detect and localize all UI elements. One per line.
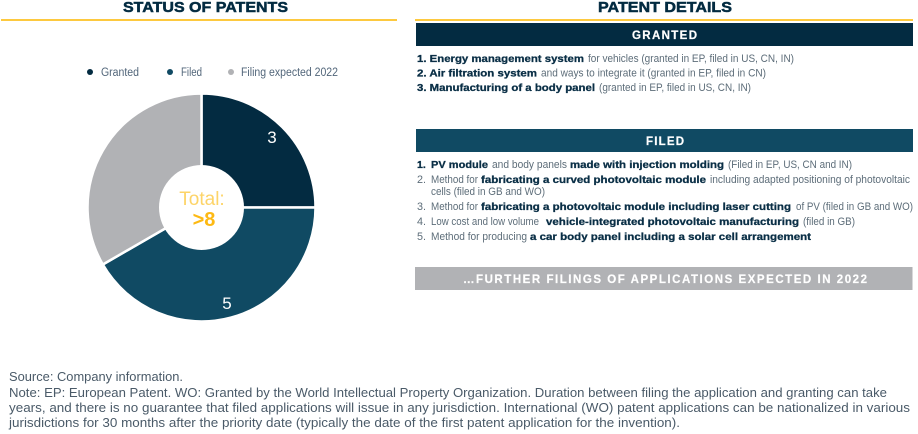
- banner: further filings: [415, 267, 912, 290]
- chart legend: Filing expected 2022: [241, 67, 338, 79]
- banner: further filings: …FURTHER FILINGS OF APPLICATIONS EXPECTED IN 2022: [463, 274, 867, 286]
- list: filed patents: 5.: [417, 231, 426, 243]
- banner: filed: [416, 129, 913, 152]
- list: filed patents: Method for producing: [431, 231, 527, 243]
- centre label: total: Total:: [179, 189, 225, 210]
- list: filed patents: Method for: [431, 174, 478, 186]
- list: filed patents: (filed in GB): [803, 216, 855, 228]
- list: filed patents: 2.: [417, 174, 426, 186]
- footnote: source and note: Source: Company information.: [9, 369, 183, 384]
- list: filed patents: including adapted positioning of photovoltaic: [710, 174, 911, 186]
- slice: granted: [202, 94, 316, 208]
- list: filed patents: fabricating a curved photovoltaic module: [481, 174, 706, 186]
- list: filed patents: a car body panel including a solar cell arrangement: [530, 231, 812, 243]
- list: filed patents: and body panels: [492, 159, 568, 171]
- chart legend: [87, 67, 338, 79]
- list: filed patents: cells (filed in GB and WO): [431, 186, 545, 198]
- value label: filed: 5: [222, 294, 232, 313]
- donut chart: patents by status: [88, 94, 316, 321]
- banner: granted: [416, 23, 913, 46]
- list: filed patents: fabricating a photovoltaic module including laser cutting: [481, 201, 791, 213]
- list: filed patents: [417, 159, 913, 243]
- banner: granted: GRANTED: [632, 30, 697, 42]
- footnote: source and note: years, and there is no guarantee that filed applications will issue in any jurisdiction. International (WO) patent applications can be nationalized in various: [9, 400, 911, 415]
- list: granted patents: (granted in EP, filed in US, CN, IN): [599, 82, 751, 94]
- list: filed patents: Method for: [431, 201, 478, 213]
- list: granted patents: for vehicles (granted in EP, filed in US, CN, IN): [588, 53, 794, 65]
- slice: filing expected 2022: [88, 94, 202, 264]
- donut hole: [159, 165, 244, 250]
- list: filed patents: vehicle-integrated photovoltaic manufacturing: [546, 216, 799, 228]
- panel: patent details: [415, 0, 913, 290]
- list: filed patents: 4.: [417, 216, 426, 228]
- list: granted patents: and ways to integrate it (granted in EP, filed in CN): [541, 68, 766, 80]
- list: filed patents: 1.: [417, 159, 426, 171]
- chart legend: Filed: [181, 67, 202, 79]
- list: granted patents: 2. Air filtration system: [417, 68, 537, 80]
- footnote: source and note: [8, 369, 911, 430]
- list: filed patents: (Filed in EP, US, CN and IN): [728, 159, 852, 171]
- panel: status of patents: [1, 0, 397, 321]
- list: granted patents: 1. Energy management system: [417, 53, 584, 65]
- list: granted patents: [417, 53, 794, 94]
- list: filed patents: made with injection molding: [570, 159, 724, 171]
- heading: status of patents: STATUS OF PATENTS: [123, 0, 288, 16]
- list: filed patents: PV module: [431, 159, 488, 171]
- banner: filed: FILED: [646, 136, 684, 148]
- footnote: source and note: jurisdictions for 30 months after the priority date (typically the date of the first patent application for the invention).: [8, 415, 680, 430]
- chart legend: Granted: [101, 67, 139, 79]
- centre label: total: >8: [193, 209, 215, 231]
- list: filed patents: 3.: [417, 201, 426, 213]
- slice: filed: [103, 208, 316, 321]
- list: granted patents: 3. Manufacturing of a body panel: [417, 82, 595, 94]
- value label: granted: 3: [267, 128, 277, 147]
- centre label: total: [179, 189, 225, 231]
- heading: patent details: PATENT DETAILS: [598, 0, 732, 16]
- footnote: source and note: Note: EP: European Patent. WO: Granted by the World Intellectual Property Organization. Duration between filing the application and granting can take: [9, 385, 887, 400]
- list: filed patents: Low cost and low volume: [431, 216, 539, 228]
